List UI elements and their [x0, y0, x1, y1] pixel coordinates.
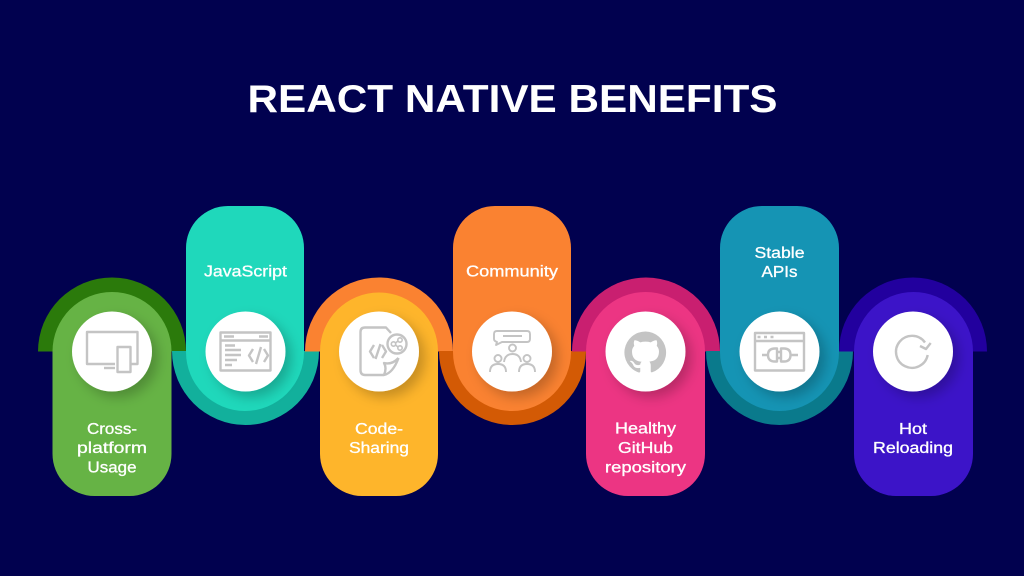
icon: reload arrow [896, 336, 931, 368]
label [349, 421, 409, 457]
icon: plug window [755, 333, 804, 370]
icon: code document with share badge [360, 328, 406, 375]
arch: hot reloading [839, 278, 987, 352]
icon: monitor and phone [87, 332, 138, 372]
label: GitHub [618, 440, 673, 457]
label [873, 421, 953, 457]
label: Community [466, 264, 558, 280]
panel: code-sharing [320, 292, 438, 496]
label: platform [77, 440, 147, 457]
arch: JavaScript [172, 351, 319, 425]
panel: healthy GitHub repository [586, 292, 705, 496]
label: Hot [899, 421, 928, 438]
panel: community [453, 206, 571, 411]
label: Sharing [349, 440, 409, 457]
arch: GitHub [572, 278, 720, 352]
panel: stable APIs [720, 206, 839, 411]
label: Healthy [615, 420, 676, 438]
arch: cross-platform [38, 278, 186, 352]
arch: community [439, 351, 586, 425]
label: Code- [355, 421, 403, 438]
label: Reloading [873, 440, 953, 457]
panel: JavaScript [186, 206, 304, 411]
icon: code window [220, 332, 270, 370]
label [754, 245, 804, 281]
label [77, 421, 147, 476]
label: Cross- [87, 421, 137, 438]
title: REACT NATIVE BENEFITS [248, 78, 778, 121]
label: Stable [754, 245, 804, 262]
label: repository [605, 460, 686, 476]
label: APIs [762, 264, 798, 281]
icon: people with speech bubble [490, 331, 535, 372]
label [605, 420, 686, 476]
arch: stable APIs [706, 351, 853, 425]
panel: cross-platform usage [52, 292, 172, 496]
panel: hot reloading [854, 292, 973, 496]
label: JavaScript [204, 264, 288, 280]
label: Usage [88, 460, 136, 476]
icon: GitHub logo [624, 332, 666, 373]
arch: code-sharing [305, 278, 453, 352]
